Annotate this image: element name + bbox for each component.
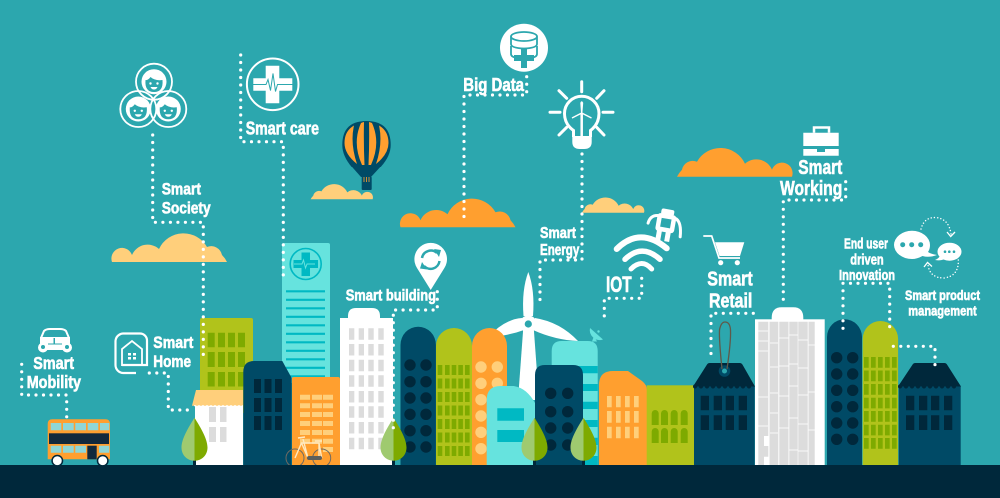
icon: smart society faces <box>120 64 186 127</box>
orange arch building <box>472 328 507 465</box>
dotted connector: smart care <box>241 55 283 279</box>
label: Smart Mobility: Mobility <box>27 372 81 392</box>
dotted connector: smart society <box>153 135 203 359</box>
cloud: orange centre <box>400 199 516 227</box>
label: Smart Retail: Smart <box>707 268 753 290</box>
icon: shopping cart <box>703 236 744 265</box>
label: Smart Home: Smart <box>153 333 194 352</box>
navy arch building <box>400 327 436 465</box>
label: Smart Society: Smart <box>162 179 201 198</box>
white tower <box>340 308 393 465</box>
bicycle <box>286 437 331 467</box>
navy house with price tag <box>693 322 755 465</box>
label: Smart Society: Society <box>162 198 211 217</box>
wind turbine <box>488 272 578 400</box>
orange sloped building <box>599 371 647 465</box>
icon: car <box>38 329 72 352</box>
label: End user driven Innovation: Innovation <box>839 267 895 284</box>
dotted connector: smart working <box>783 182 846 307</box>
navy house right <box>898 363 961 465</box>
label: Smart product management: management <box>908 303 977 319</box>
green building left <box>200 318 253 413</box>
icon: speech bubbles with cycle arrows <box>894 217 962 278</box>
green arch building <box>436 328 472 465</box>
icon: smart home <box>115 334 147 373</box>
dotted connector: smart retail <box>711 313 753 358</box>
dotted connector: big data <box>464 77 527 219</box>
tree 4 <box>570 418 596 465</box>
satellite dish <box>590 328 603 342</box>
icon: big data cylinder <box>500 24 548 72</box>
icon: wifi <box>617 237 667 269</box>
ground <box>0 465 1000 498</box>
label: Smart care: Smart care <box>246 118 319 138</box>
label: Smart Working: Working <box>780 178 842 200</box>
icon: briefcase <box>803 128 839 156</box>
small white house <box>192 390 243 465</box>
double-decker bus <box>48 419 110 466</box>
dotted connector: smart building <box>393 292 437 428</box>
cloud: orange right <box>677 148 793 177</box>
label: End user driven Innovation: End user <box>844 236 888 253</box>
label: Smart Working: Smart <box>798 157 843 179</box>
dotted connector: smart product management <box>893 346 935 365</box>
cloud: above smart society <box>111 233 227 262</box>
hot-air balloon <box>342 121 391 190</box>
green building centre right <box>647 385 694 465</box>
icon: smart care cross <box>247 59 298 110</box>
dark building left <box>243 361 292 465</box>
navy rounded building <box>535 365 583 465</box>
icon: bulb with turbine <box>550 82 613 149</box>
label: Smart product management: Smart product <box>905 287 980 303</box>
label: Smart Retail: Retail <box>709 290 752 312</box>
cloud: pale centre right <box>582 197 644 213</box>
cloud: below balloon <box>311 184 373 199</box>
label: Smart Home: Home <box>153 352 191 371</box>
tree 2 <box>380 418 406 465</box>
dotted connector: smart mobility <box>22 364 67 418</box>
label: Smart Energy: Smart <box>540 225 576 242</box>
dotted connector: smart home <box>149 373 193 410</box>
striped cyan building <box>552 341 598 465</box>
label: Smart building: Smart building <box>346 288 436 305</box>
label: Smart Mobility: Smart <box>33 353 74 373</box>
white grid tower <box>755 307 825 465</box>
icon: robot <box>645 206 685 244</box>
label: End user driven Innovation: driven <box>850 251 884 268</box>
hospital tower <box>282 243 330 383</box>
label: IOT: IOT <box>606 272 632 297</box>
tree 3 <box>522 418 548 465</box>
dotted connector: smart energy <box>540 154 582 304</box>
icon: location pin with refresh arrows <box>414 243 447 290</box>
tree 1 <box>182 418 208 465</box>
cyan curved building <box>487 386 535 465</box>
dotted connector: end user innovation <box>843 283 890 328</box>
green arch building right <box>863 321 898 465</box>
orange building with bicycle <box>292 377 340 465</box>
dotted connector: iot <box>604 278 642 323</box>
label: Big Data: Big Data <box>463 75 525 95</box>
label: Smart Energy: Energy <box>540 242 580 259</box>
navy arch building right <box>827 319 862 465</box>
